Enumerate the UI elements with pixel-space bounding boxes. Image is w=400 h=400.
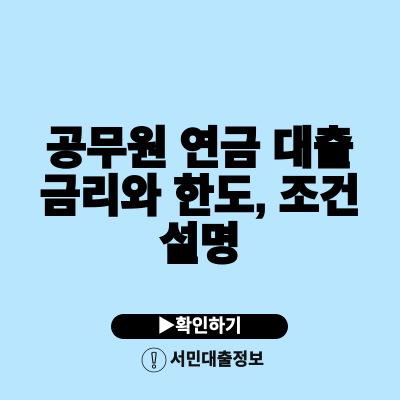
button: 확인하기 [111, 314, 288, 339]
brand name: 서민대출정보 [170, 350, 264, 369]
title line 3: 설명 [160, 220, 240, 269]
button: 확인하기: ▶확인하기 [157, 316, 242, 336]
icon: exclamation circle [142, 348, 166, 372]
title line 1: 공무원 연금 대출 [46, 124, 354, 173]
brand: 서민대출정보 [142, 348, 264, 372]
title [40, 124, 360, 269]
title line 2: 금리와 한도, 조건 [40, 172, 360, 221]
